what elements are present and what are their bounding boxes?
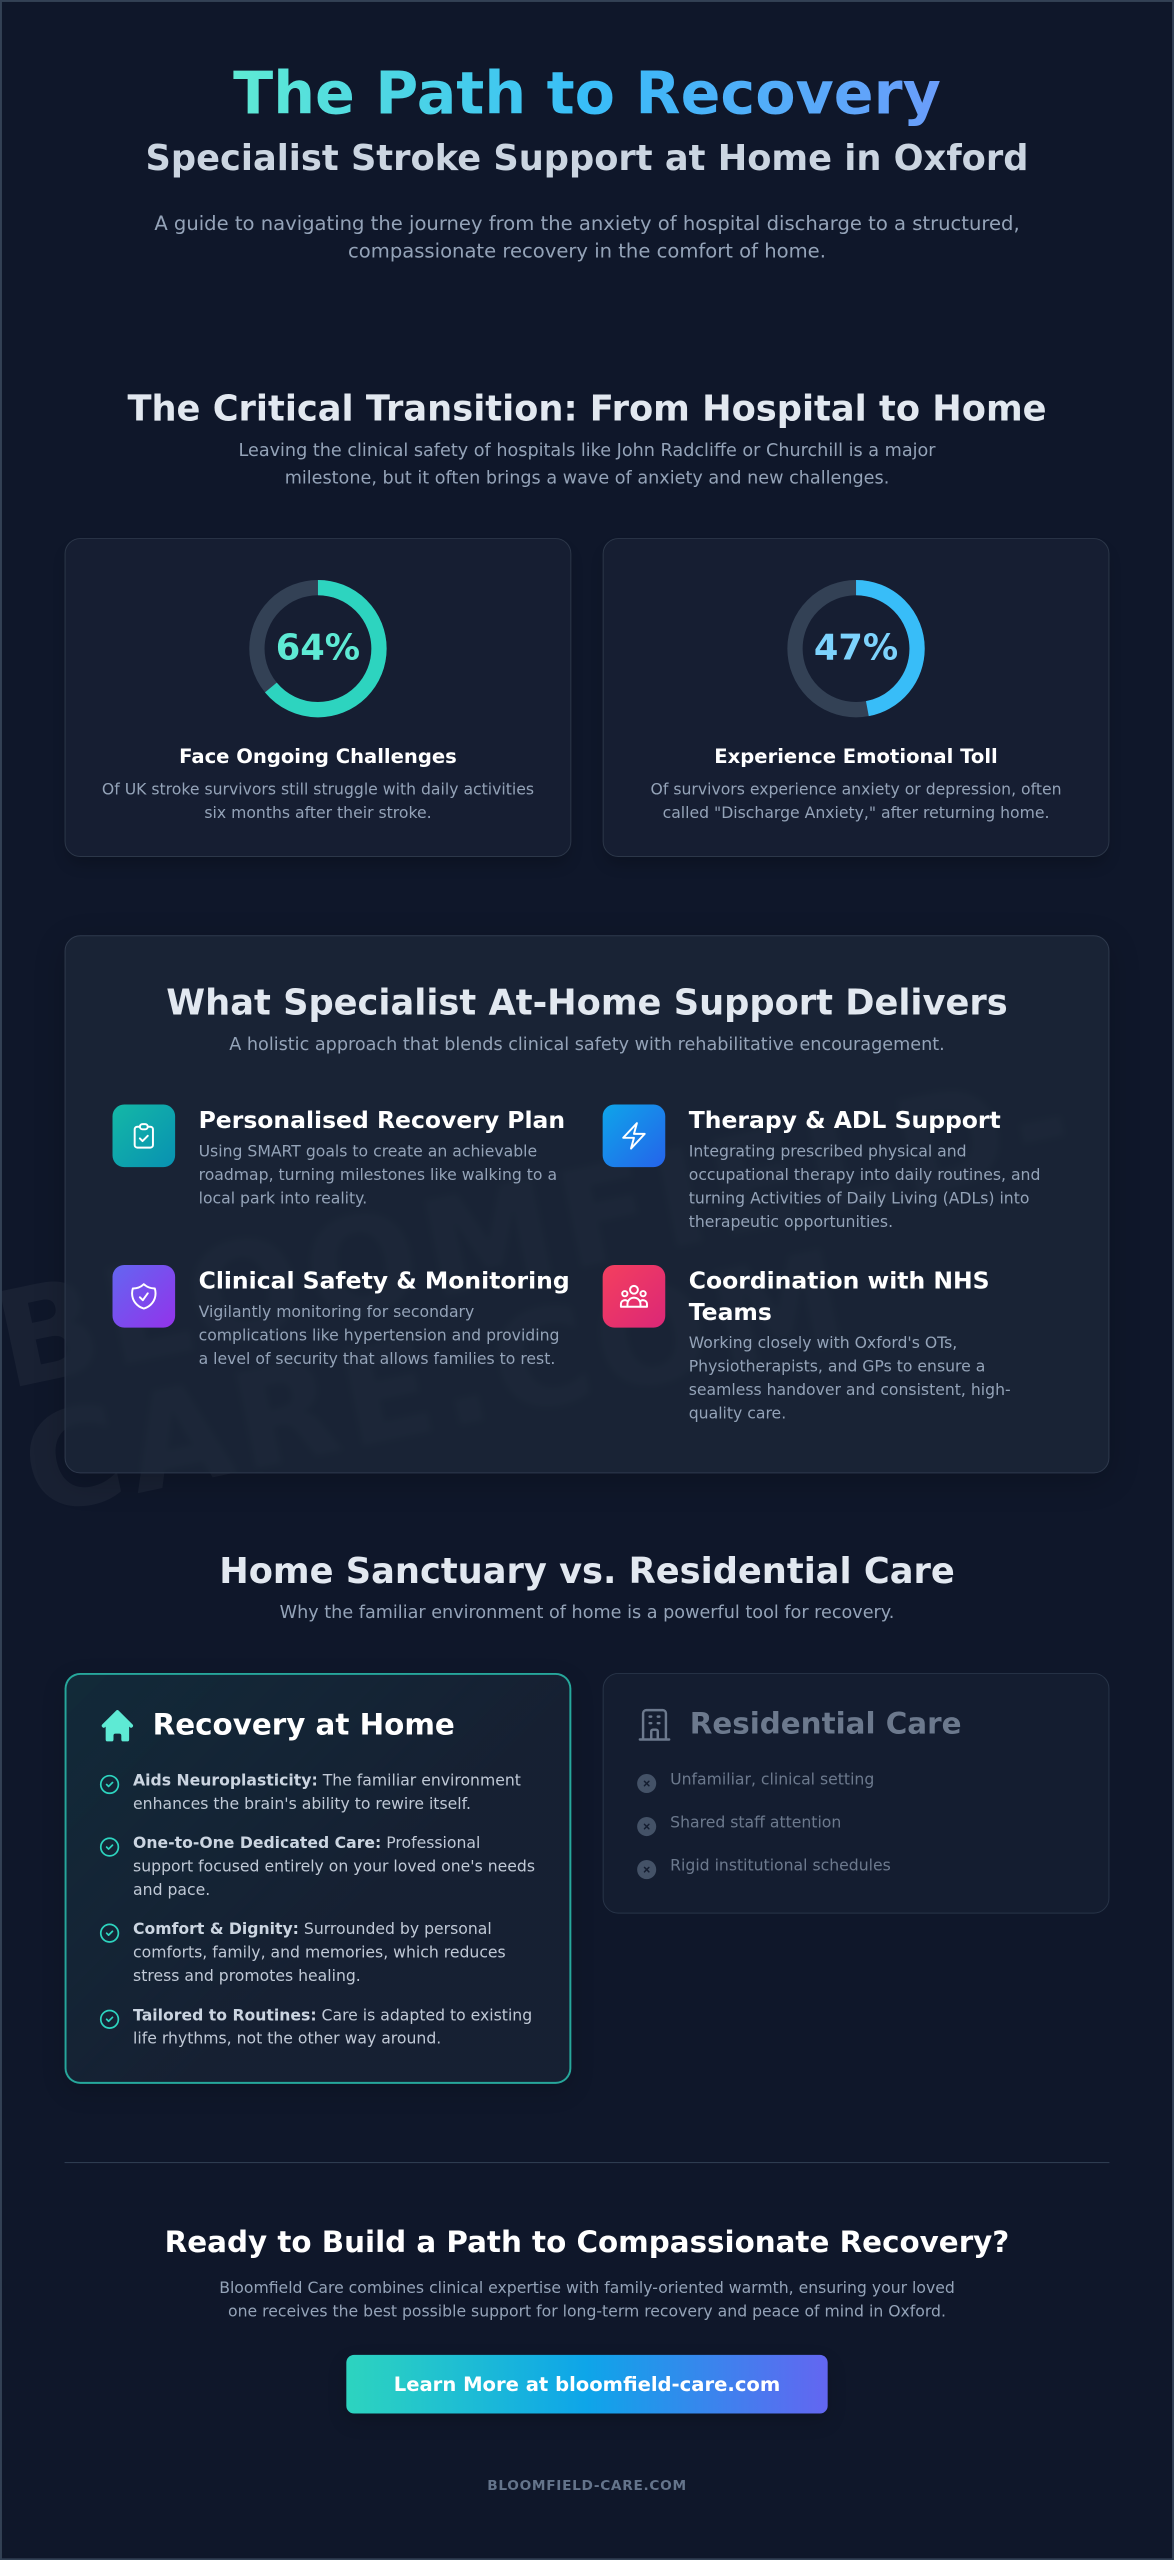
CTA heading: Ready to Build a Path to Compassionate Recovery? [165,2226,1009,2260]
benefit: dedicated care [100,1833,535,1899]
feature: recovery plan [112,1104,565,1207]
stat title: Face Ongoing Challenges [179,745,457,768]
feature: clinical safety [112,1265,570,1368]
stat description [102,780,534,822]
drawback: setting: Unfamiliar, clinical setting [670,1770,874,1788]
icon: user group [603,1265,665,1328]
benefit: comfort: Comfort & Dignity: Surrounded by personal [133,1919,492,1938]
benefit: comfort [100,1919,506,1985]
feature text [198,1267,570,1368]
icon: bolt [603,1105,665,1167]
chart: 47% donut: 47% [814,628,898,668]
drawback: schedules: Rigid institutional schedules [670,1856,891,1874]
card heading with building icon: Residential Care [690,1707,961,1741]
feature text: Personalised Recovery Plan [199,1106,565,1134]
benefit: neuroplasticity: Aids Neuroplasticity: The familiar environment [133,1771,521,1789]
feature text [688,1106,1040,1231]
section lead text: Why the familiar environment of home is a powerful tool for recovery. [280,1602,894,1623]
benefit: comfort: comforts, family, and memories, which reduces [133,1943,506,1962]
feature text: complications like hypertension and providing [199,1326,559,1344]
panel: stat 47% [603,538,1109,857]
comparison cards [64,1673,1110,2084]
heading: Home Sanctuary vs. Residential Care [219,1552,955,1592]
benefit: routines: Tailored to Routines: Care is adapted to existing [133,2006,532,2024]
section: home vs residential [64,1552,1110,2084]
drawback: attention: Shared staff attention [670,1813,841,1831]
stat cards [64,538,1110,857]
feature text: quality care. [689,1404,786,1422]
benefit: dedicated care: and pace. [133,1880,210,1899]
subtitle: Specialist Stroke Support at Home in Oxford [146,138,1028,179]
section lead text: milestone, but it often brings a wave of anxiety and new challenges. [285,467,889,488]
watermark: CARE.COM [10,1220,866,1547]
panel: stat 64% [65,538,571,857]
feature text [199,1106,565,1207]
stat description [651,780,1062,822]
stat description: Of survivors experience anxiety or depression, often [651,780,1062,798]
benefit: routines [100,2006,532,2048]
feature text: roadmap, turning milestones like walking to a [199,1165,557,1184]
section: critical transition [64,389,1110,857]
benefit: neuroplasticity: enhances the brain's ability to rewire itself. [133,1794,471,1813]
feature text: Therapy & ADL Support [689,1106,1001,1134]
icon: shield check [113,1265,175,1328]
feature text: Vigilantly monitoring for secondary [199,1302,474,1321]
panel: residential care [603,1673,1109,1914]
icon: clipboard check [113,1105,175,1167]
footer: BLOOMFIELD-CARE.COM [487,2478,687,2494]
feature text: occupational therapy into daily routines, and [689,1165,1040,1184]
feature text: Using SMART goals to create an achievable [199,1142,537,1160]
feature: NHS coordination [602,1265,1011,1422]
chart: 47% donut [787,580,925,718]
chart: 64% donut: 64% [276,628,360,668]
feature grid [112,1104,1040,1422]
benefit: neuroplasticity [100,1771,521,1813]
title: The Path to Recovery [233,60,941,128]
header [146,60,1028,262]
drawback: attention [637,1813,841,1836]
benefit: dedicated care: One-to-One Dedicated Care: Professional [133,1833,480,1852]
stat title: Experience Emotional Toll [714,745,998,768]
CTA text [219,2279,955,2321]
stat description: called "Discharge Anxiety," after returning home. [663,803,1049,822]
feature text: Physiotherapists, and GPs to ensure a [689,1357,985,1376]
heading: The Critical Transition: From Hospital to Home [127,389,1047,429]
feature: therapy [602,1104,1040,1231]
intro text: A guide to navigating the journey from the anxiety of hospital discharge to a structured, [154,211,1020,235]
feature text: therapeutic opportunities. [689,1212,893,1231]
stat description: six months after their stroke. [204,803,432,822]
panel lead text: A holistic approach that blends clinical safety with rehabilitative encouragement. [229,1034,945,1054]
feature text: a level of security that allows families to rest. [199,1349,555,1368]
feature text: Clinical Safety & Monitoring [199,1267,570,1294]
watermark: BLOOMFIELD- [0,1041,1090,1420]
benefit: routines: life rhythms, not the other way around. [133,2029,441,2048]
drawback: setting [637,1770,874,1793]
intro text [154,211,1020,262]
intro text: compassionate recovery in the comfort of home. [348,239,826,262]
drawback: schedules [637,1856,891,1880]
panel: specialist support [65,935,1109,1473]
card heading with home icon: Recovery at Home [153,1708,455,1742]
benefit: dedicated care: support focused entirely on your loved one's needs [133,1857,535,1875]
call to action [165,2226,1009,2494]
chart: 64% donut [249,580,387,718]
benefit: comfort: stress and promotes healing. [133,1966,361,1985]
feature text: local park into reality. [199,1189,367,1207]
CTA button [347,2355,827,2414]
stat description: Of UK stroke survivors still struggle with daily activities [102,780,534,798]
feature text: Integrating prescribed physical and [689,1142,967,1160]
CTA text: Bloomfield Care combines clinical expertise with family-oriented warmth, ensuring your loved [219,2279,955,2297]
CTA button: Learn More at bloomfield-care.com [394,2372,780,2396]
CTA text: one receives the best possible support for long-term recovery and peace of mind in Oxford. [228,2302,946,2321]
section lead text: Leaving the clinical safety of hospitals like John Radcliffe or Churchill is a major [238,440,936,460]
feature text: Coordination with NHS [689,1267,990,1294]
feature text: Teams [689,1298,772,1326]
heading: What Specialist At-Home Support Delivers [166,983,1008,1023]
feature text: seamless handover and consistent, high- [689,1380,1011,1399]
feature text [688,1267,1011,1422]
feature text: Working closely with Oxford's OTs, [689,1333,957,1352]
feature text: turning Activities of Daily Living (ADLs) into [689,1189,1029,1207]
section lead text [238,440,936,488]
panel: recovery at home [65,1673,571,2084]
